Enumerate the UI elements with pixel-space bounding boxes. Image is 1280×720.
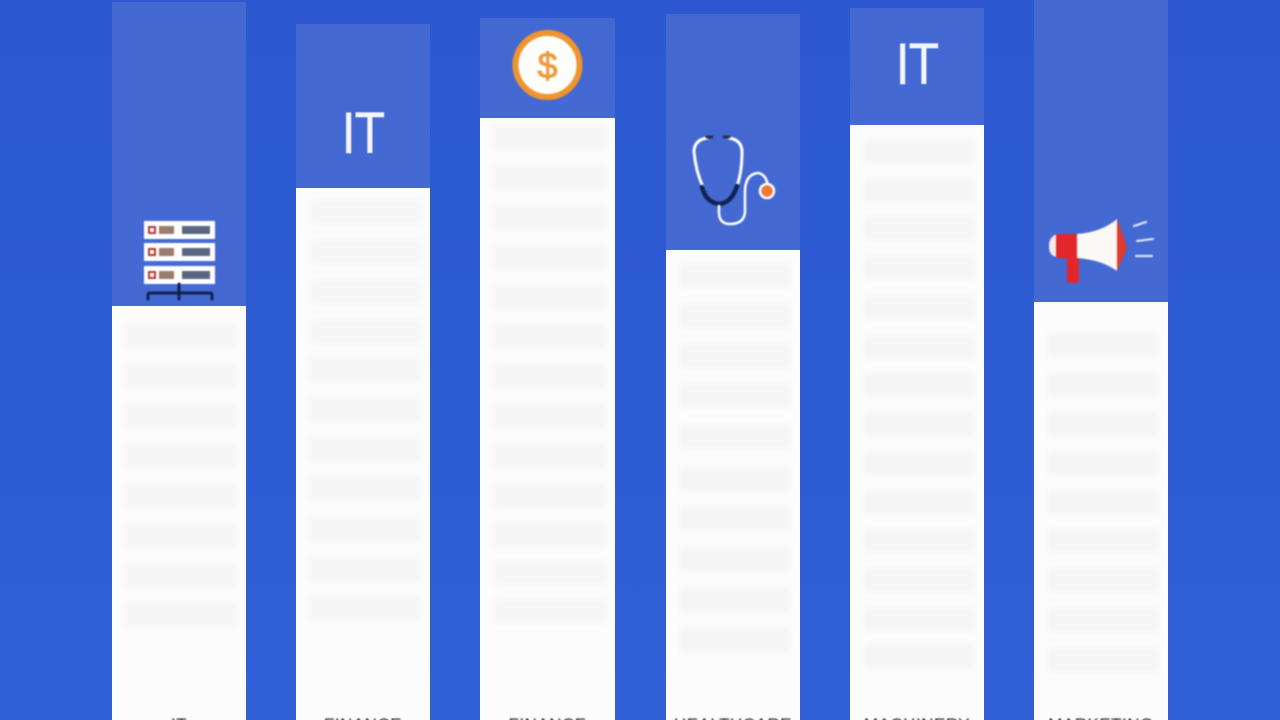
content sheet: column 4 [666,250,800,720]
content sheet: column 3 [480,118,615,720]
content sheet: column 1 [112,306,246,720]
header band: column 6 [1034,0,1168,302]
content sheet: column 5 [850,125,984,720]
header band: column 2 [296,24,430,188]
icon: IT text: IT [342,101,384,166]
header band: column 5 [850,8,984,125]
icon: dollar coin [512,29,584,101]
content sheet: column 6 [1034,302,1168,720]
content sheet: column 2 [296,188,430,720]
header band: column 1 [112,2,246,306]
icon: server rack [143,220,216,302]
panel: column 5 Machinery [850,8,984,720]
header band: column 3 [480,18,615,118]
icon: IT text: IT [896,32,938,97]
panel: column 2 Finance [296,24,430,720]
header band: column 4 [666,14,800,250]
panel: column 6 Marketing [1034,0,1168,720]
panel: column 4 Healthcare [666,14,800,720]
panel: column 3 Finance [480,18,615,720]
icon: stethoscope [692,134,776,226]
panel: column 1 IT [112,2,246,720]
icon: dollar coin: $ [537,45,558,86]
icon: megaphone [1048,218,1155,284]
